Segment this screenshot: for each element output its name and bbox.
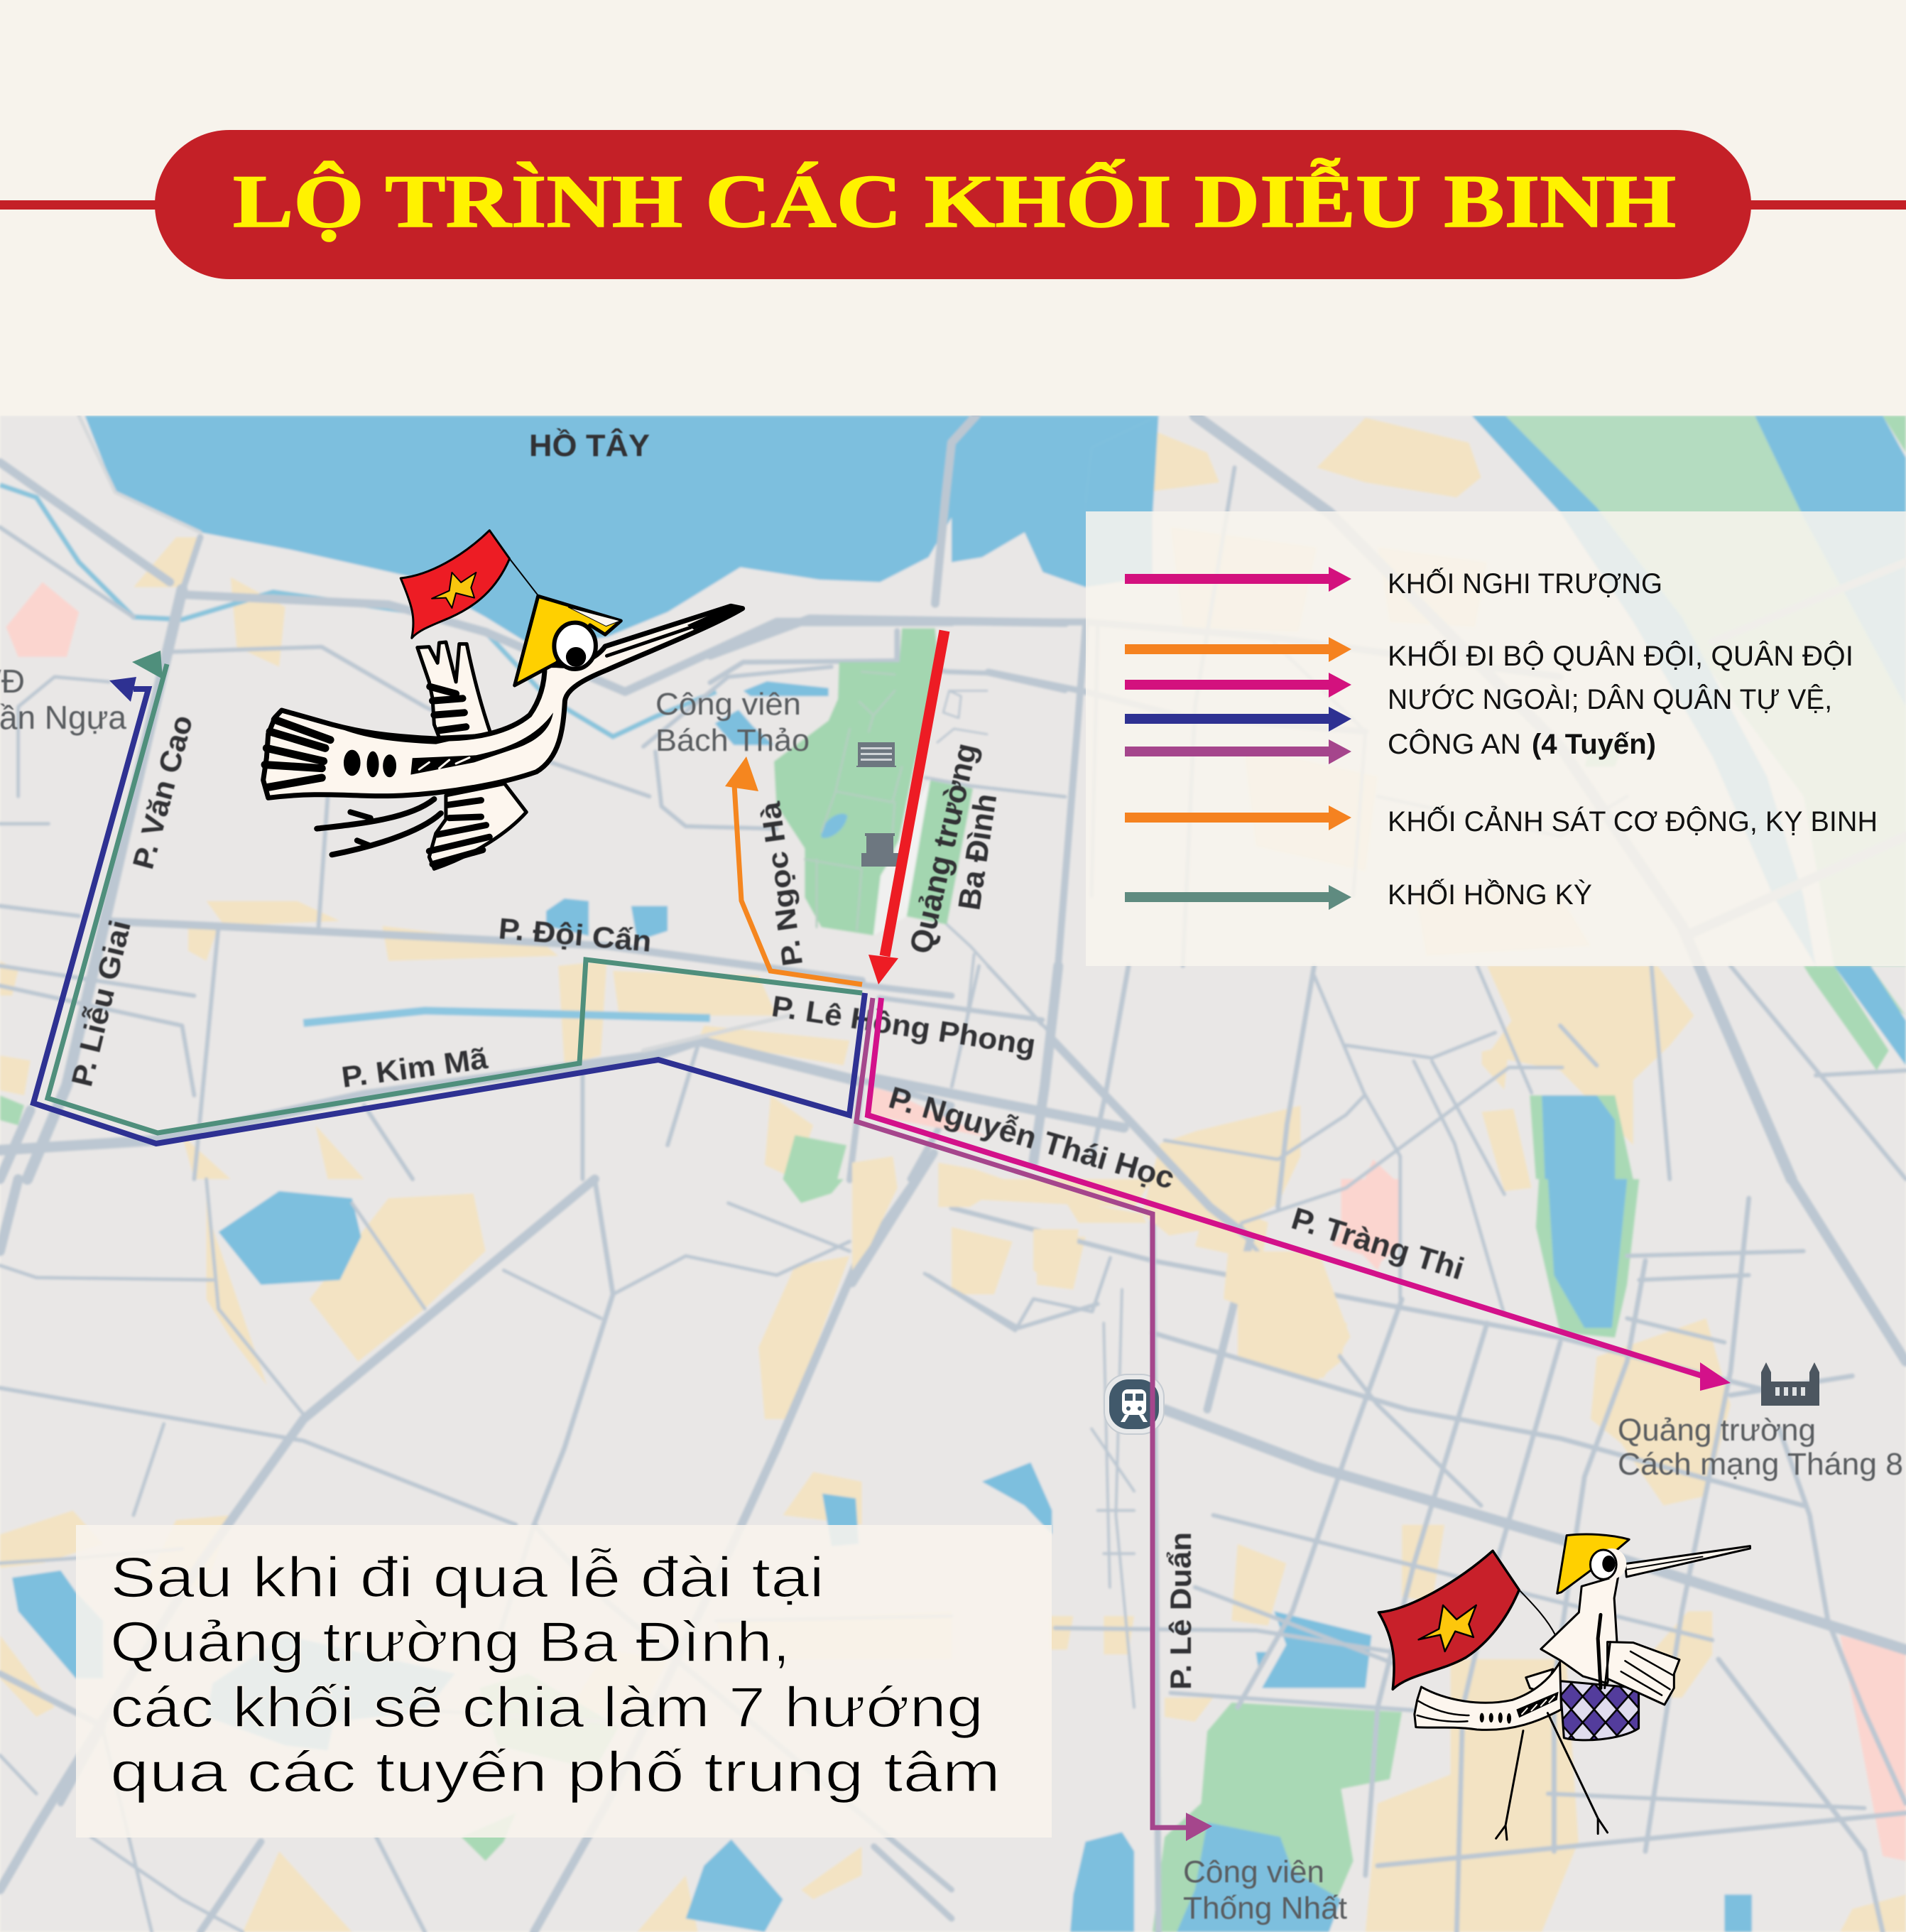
map labels [0, 428, 1903, 1926]
panel: caption [76, 1525, 1052, 1838]
label: P. Le Hong Phong: P. Lê Hồng Phong [770, 989, 1038, 1062]
legend text: ceremonial block: KHỐI NGHI TRƯỢNG [1388, 567, 1662, 599]
legend text: walking blocks: CÔNG AN [1388, 728, 1521, 760]
crane hat [515, 596, 621, 685]
icon: railway station [1104, 1374, 1164, 1434]
legend arrow: orange police [1125, 805, 1351, 830]
standing crane tail [1415, 1662, 1562, 1730]
caption text: các khối sẽ chia làm 7 hướng [110, 1676, 984, 1739]
legend arrow: purple parade [1125, 739, 1351, 764]
legend text: police and cavalry: KHỐI CẢNH SÁT CƠ ĐỘNG, KỴ BINH [1388, 805, 1878, 837]
label: Bach Thao park: Công viên [655, 687, 801, 722]
standing crane flag [1378, 1551, 1519, 1689]
standing crane head [1596, 1548, 1626, 1579]
label: P. Le Duan: P. Lê Duẩn [1164, 1532, 1197, 1690]
label: Ba Dinh: Ba Đình [952, 791, 1003, 912]
standing crane basket [1560, 1681, 1639, 1740]
legend arrow: orange parade [1125, 637, 1351, 662]
label: P. Nguyen Thai Hoc: P. Nguyễn Thái Học [885, 1080, 1179, 1196]
legend text: walking blocks: (4 Tuyến) [1532, 729, 1656, 760]
caption text: Sau khi đi qua lễ đài tại [110, 1546, 824, 1609]
icon: standing crane with flag and basket [1378, 1534, 1750, 1840]
legend arrow: teal [1125, 885, 1351, 910]
legend text: walking blocks: NƯỚC NGOÀI; DÂN QUÂN TỰ VỆ, [1388, 683, 1832, 715]
standing crane beak [1625, 1546, 1750, 1577]
label: P. Ngoc Ha: P. Ngọc Hà [755, 799, 809, 968]
label: P. Van Cao: P. Văn Cao [126, 712, 199, 872]
crane body [263, 606, 743, 798]
route: red Ba Dinh square [868, 631, 944, 984]
standing crane hat [1557, 1534, 1629, 1593]
caption text [110, 1546, 1001, 1803]
icon: presidential palace building [856, 742, 896, 767]
standing crane back leg [1547, 1713, 1608, 1834]
title banner [0, 130, 1906, 279]
legend arrow: navy parade [1125, 707, 1351, 732]
icon: opera house [1761, 1362, 1819, 1406]
standing crane back feathers [1526, 1669, 1553, 1693]
crane eye [554, 623, 596, 669]
standing crane front leg [1496, 1731, 1523, 1840]
crane flag [401, 531, 510, 638]
label: P. Lieu Giai: P. Liễu Giai [64, 917, 137, 1090]
label: P. Trang Thi: P. Tràng Thi [1287, 1201, 1468, 1286]
label: Thong Nhat park: Công viên [1183, 1855, 1324, 1889]
label: P. Doi Can: P. Đội Cấn [497, 911, 653, 958]
label: Ho Tay: HỒ TÂY [529, 428, 650, 463]
Ho Tay lake [85, 416, 952, 647]
caption text: Quảng trường Ba Đình, [110, 1610, 790, 1673]
caption text: qua các tuyến phố trung tâm [110, 1740, 1001, 1803]
label: Quang truong: Quảng trường [903, 740, 984, 957]
standing crane body and neck [1541, 1575, 1618, 1683]
label: Cach mang Thang 8 square: Quảng trường [1618, 1413, 1816, 1448]
label: P. Kim Ma: P. Kim Mã [339, 1041, 490, 1094]
label: Thong Nhat park line 2: Thống Nhất [1183, 1891, 1347, 1926]
label: Cach mang Thang 8 square line 2: Cách mạng Tháng 8 [1618, 1447, 1903, 1482]
legend text: walking blocks [1388, 639, 1853, 760]
label: Bach Thao park line 2: Bách Thảo [655, 723, 810, 758]
panel: legend [1086, 511, 1906, 966]
standing crane right wing [1608, 1642, 1679, 1705]
icon: flying crane with flag [263, 531, 744, 869]
route: Hong Ky block [48, 651, 862, 1133]
icon: mausoleum building [861, 833, 898, 867]
crane upper wing [418, 642, 491, 737]
route: orange Ngoc Ha [725, 756, 862, 984]
title banner: LỘ TRÌNH CÁC KHỐI DIỄU BINH [233, 158, 1676, 243]
route: navy parade block [33, 677, 865, 1144]
route: pink ceremonial block [868, 998, 1731, 1391]
map background [0, 416, 1906, 1932]
crane legs [317, 799, 441, 854]
route: purple parade block [856, 998, 1212, 1841]
legend text: walking blocks: KHỐI ĐI BỘ QUÂN ĐỘI, QUÂN ĐỘI [1388, 639, 1853, 672]
crane lower wing [429, 783, 526, 869]
legend arrow: pink [1125, 567, 1351, 592]
legend arrow: pink parade [1125, 673, 1351, 698]
legend text: Hong Ky block: KHỐI HỒNG KỲ [1388, 878, 1592, 911]
